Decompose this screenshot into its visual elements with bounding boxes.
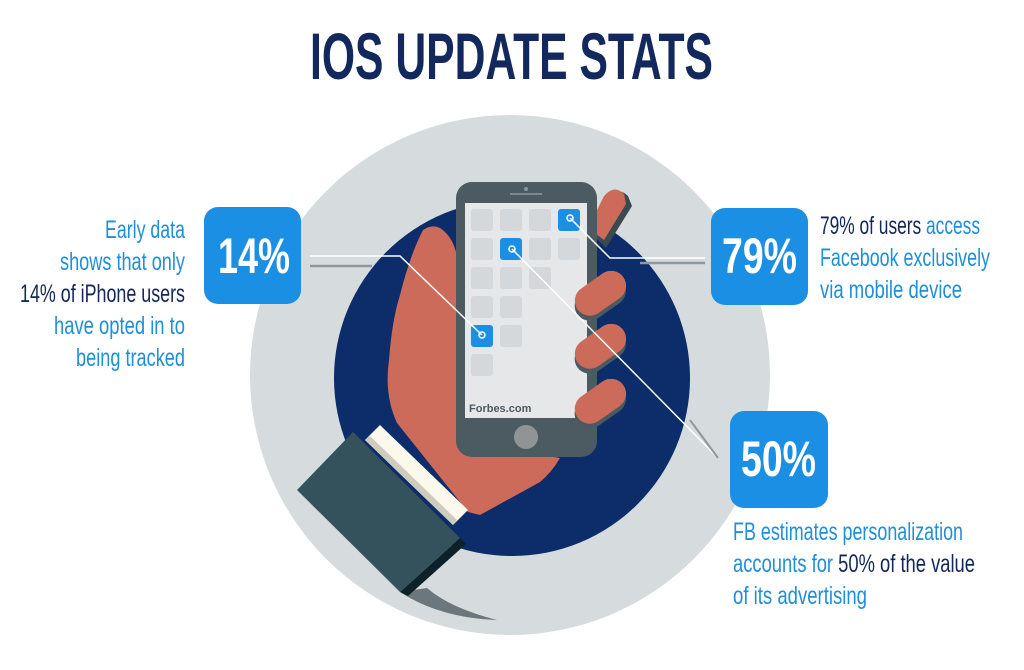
top finger [590,191,632,248]
text block: 14% [20,216,185,372]
stat box: 50%: 50% [741,431,816,487]
fingers [566,265,634,327]
phone [456,182,597,457]
text block: 14%: 14% of iPhone users [20,280,185,308]
app icons [471,209,580,376]
text block: 50%: accounts for 50% of the value [733,550,975,578]
text block: 14%: shows that only [60,248,185,276]
stat box: 14%: 14% [218,228,290,284]
text block: 14%: being tracked [76,344,185,372]
connector lines [310,215,718,458]
hand [388,226,560,515]
background gray circle [250,115,770,635]
stat box: 50% [730,411,828,508]
illustration: hand holding phone [297,182,634,620]
text block: 79%: 79% of users access [820,212,980,240]
text block: 14%: have opted in to [54,312,185,340]
text block: 50%: of its advertising [733,582,867,610]
sleeve [297,432,460,592]
stat box: 79%: 79% [722,228,797,284]
text block: 79%: via mobile device [820,276,962,304]
text block: 79% [820,212,990,304]
text block: 14%: Early data [105,216,185,244]
stat box: 14% [204,207,301,304]
navy circle [334,200,690,556]
text block: 50% [733,518,975,610]
stat box: 79% [711,208,808,305]
title: IOS UPDATE STATS [310,19,713,93]
sleeve shadow [400,588,497,620]
cuff [365,425,468,525]
source label: Forbes.com [469,403,532,415]
